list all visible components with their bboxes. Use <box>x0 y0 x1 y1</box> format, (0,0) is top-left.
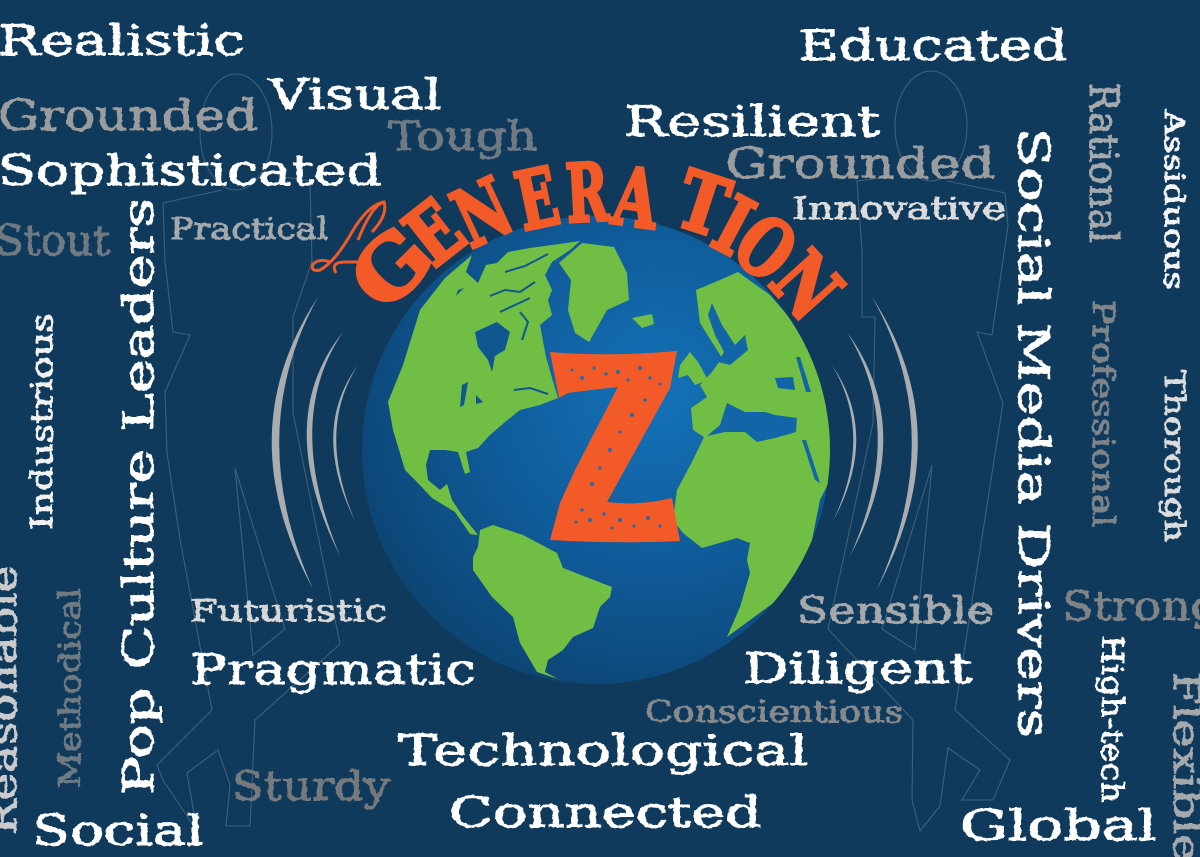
eurasia and africa <box>673 272 835 637</box>
big letter Z <box>550 351 680 542</box>
word: Pragmatic: Pragmatic <box>190 645 476 694</box>
word: Educated: Educated <box>798 21 1068 70</box>
word: Connected: Connected <box>449 788 762 837</box>
word: Social Media Drivers: Social Media Drivers <box>1009 128 1058 738</box>
word: Pop Culture Leaders: Pop Culture Leaders <box>114 198 163 795</box>
curved title GENERATION: G <box>332 208 452 328</box>
word: Sophisticated: Sophisticated <box>0 146 382 195</box>
word: Methodical: Methodical <box>53 588 88 788</box>
curved title GENERATION: N <box>753 233 860 338</box>
curved title GENERATION: A <box>607 148 665 248</box>
word: Visual: Visual <box>267 70 442 119</box>
right person silhouette <box>828 71 1010 831</box>
south america <box>473 525 612 679</box>
word: Futuristic: Futuristic <box>190 594 387 629</box>
word: Assiduous: Assiduous <box>1158 109 1189 290</box>
word: Grounded left: Grounded <box>0 91 258 140</box>
united kingdom <box>678 352 708 385</box>
word: Conscientious: Conscientious <box>645 695 903 730</box>
word: High-tech: High-tech <box>1094 635 1129 803</box>
north america <box>388 241 580 535</box>
curved title GENERATION: E <box>508 149 567 249</box>
word: Rational: Rational <box>1080 83 1126 243</box>
word: Sturdy: Sturdy <box>232 764 390 810</box>
greenland <box>559 243 629 342</box>
word: Strong: Strong <box>1062 584 1200 630</box>
curved title GENERATION: T <box>665 152 740 256</box>
left person silhouette <box>157 74 340 831</box>
word: Practical: Practical <box>170 212 328 247</box>
globe <box>362 216 835 684</box>
iceland <box>632 314 654 328</box>
curved title GENERATION: E <box>388 182 482 284</box>
curved title GENERATION: I <box>699 178 768 274</box>
curved title GENERATION: O <box>717 195 814 300</box>
sound arcs left <box>272 297 358 589</box>
word: Innovative: Innovative <box>792 191 1006 227</box>
word: Global: Global <box>960 801 1157 850</box>
word: Technological: Technological <box>398 726 808 775</box>
word: Sensible: Sensible <box>797 591 994 632</box>
word: Grounded right: Grounded <box>725 139 995 188</box>
word: Professional: Professional <box>1085 300 1120 527</box>
sound arcs right <box>832 297 918 589</box>
word: Realistic: Realistic <box>0 16 245 65</box>
curved title GENERATION <box>312 145 860 338</box>
word: Thorough: Thorough <box>1158 370 1191 542</box>
word: Tough: Tough <box>388 114 537 160</box>
curved title GENERATION: N <box>439 159 526 266</box>
word: Resilient: Resilient <box>624 97 880 146</box>
word: Social: Social <box>32 806 204 855</box>
curved title GENERATION: R <box>564 145 611 241</box>
word: Industrious: Industrious <box>25 313 60 530</box>
word: Diligent: Diligent <box>743 644 972 693</box>
G swash <box>312 202 385 273</box>
